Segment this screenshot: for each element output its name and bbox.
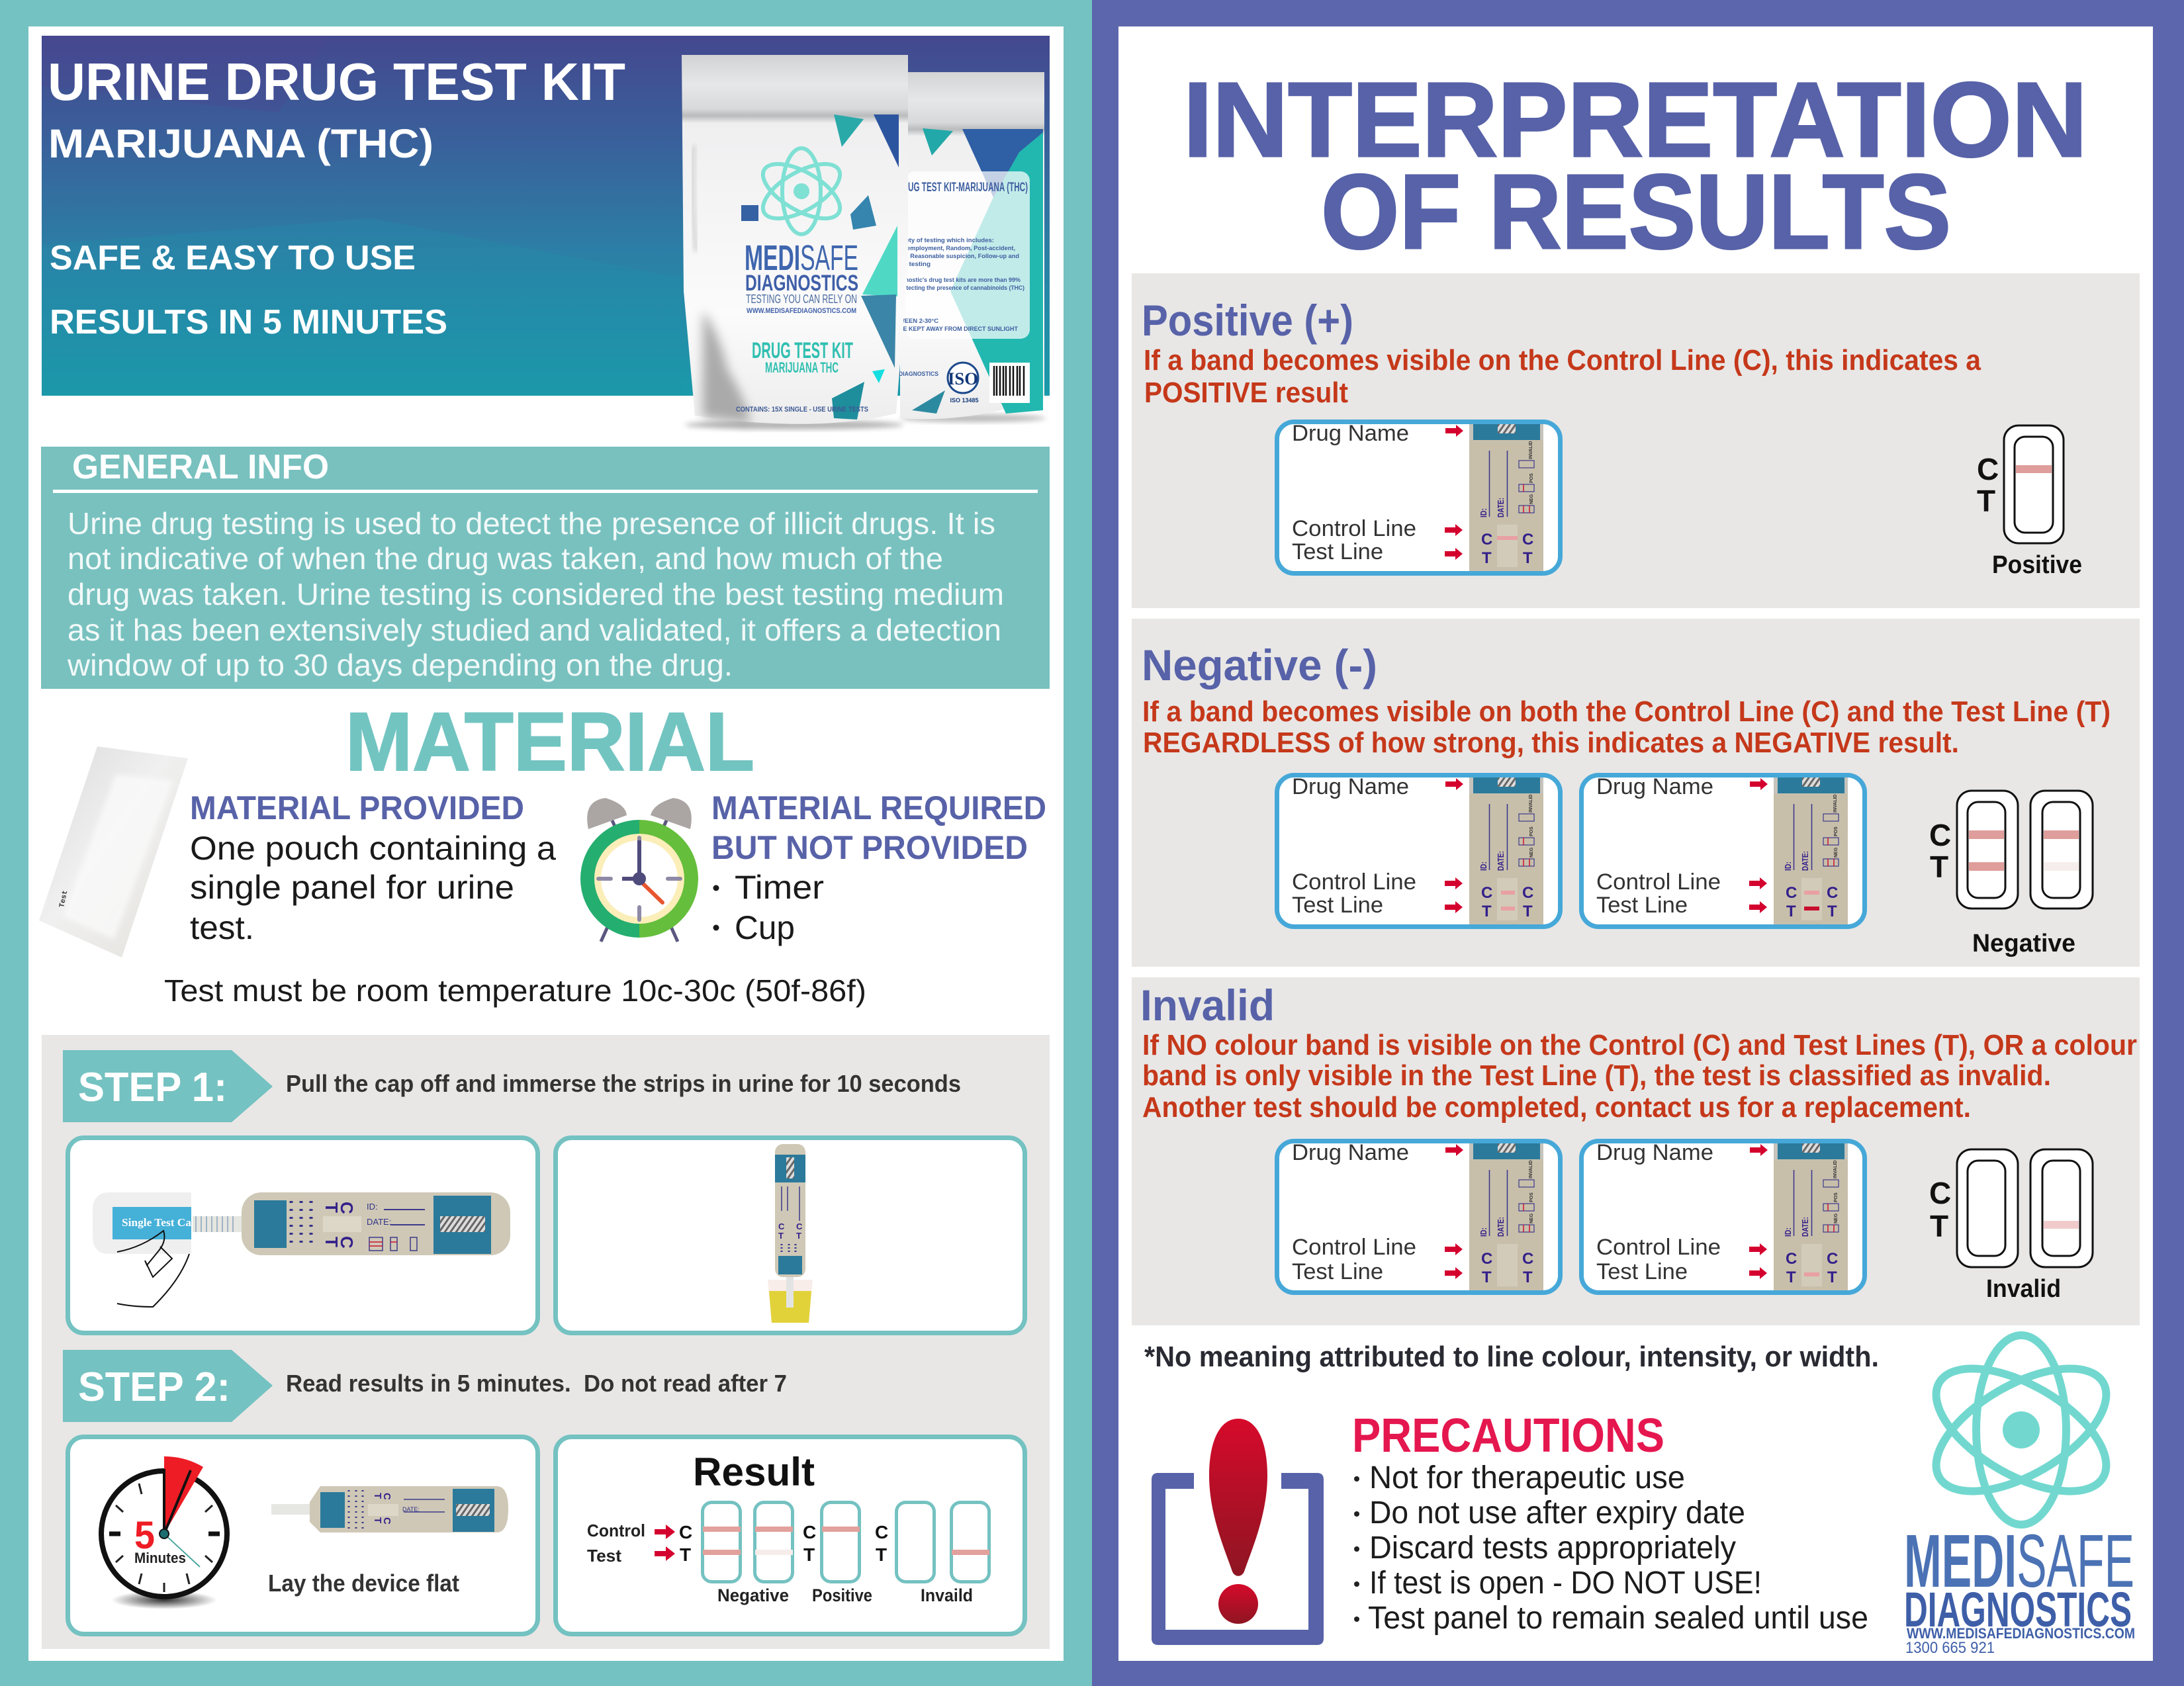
negative test card 2: NEG xyxy=(1834,847,1839,858)
step 1 box: open pouch xyxy=(68,1138,537,1333)
negative test card 2 xyxy=(1582,774,1865,926)
product: back pouch: ISO 13485 xyxy=(950,397,979,404)
product: back pouch: letecting the presence of cannabinoids (THC) xyxy=(901,285,1024,291)
precautions: Test panel to remain sealed until use xyxy=(1368,1601,1868,1636)
invalid test card 2: C xyxy=(1786,1250,1797,1268)
negative test card 2: POS xyxy=(1834,826,1839,836)
banner title: URINE DRUG TEST KIT xyxy=(48,52,625,111)
panel: general info xyxy=(41,447,1050,689)
negative test card 1: INVALID xyxy=(1529,795,1533,813)
step 1 box: open pouch: Single Test Ca xyxy=(122,1216,191,1229)
step 2 box: result legend: C xyxy=(875,1522,888,1542)
product: back pouch: ISO xyxy=(948,369,978,388)
invalid test card 1: C xyxy=(1481,1250,1492,1268)
negative test card 2: Drug Name xyxy=(1596,774,1713,799)
logo: medisafe: WWW.MEDISAFEDIAGNOSTICS.COM xyxy=(1907,1625,2135,1642)
negative test card 1: DATE: xyxy=(1496,851,1506,871)
negative test card 1: POS xyxy=(1529,826,1534,836)
step 2 box: result legend: T xyxy=(680,1544,691,1565)
negative test card 2: T xyxy=(1827,903,1837,920)
product: back pouch: in, Reasonable suspicion, Follow-up and xyxy=(901,253,1019,259)
step 2 box: result legend: C xyxy=(803,1522,816,1542)
invalid test card 1: T xyxy=(1482,1268,1492,1286)
general info text: not indicative of when the drug was taken, and how much of the xyxy=(68,541,943,576)
invalid test card 2: C xyxy=(1827,1250,1838,1268)
panel: invalid xyxy=(1132,977,2140,1325)
positive test card: POS xyxy=(1529,473,1534,483)
left white sheet xyxy=(28,26,1064,1661)
invalid test card 2: Test Line xyxy=(1596,1259,1688,1284)
product: front pouch: TESTING YOU CAN RELY ON xyxy=(746,292,857,306)
step 2 box: result legend: C xyxy=(679,1522,692,1542)
general info text xyxy=(67,506,1004,682)
positive strip diagram: T xyxy=(1977,484,1995,518)
negative test card 2: DATE: xyxy=(1800,851,1810,871)
positive description: POSITIVE result xyxy=(1144,377,1348,409)
negative test card 2: ID: xyxy=(1783,862,1793,871)
step 2 box: result legend xyxy=(556,1437,1024,1634)
positive test card: C xyxy=(1481,531,1492,549)
banner subtitle: MARIJUANA (THC) xyxy=(48,121,433,166)
positive test card: T xyxy=(1482,549,1492,567)
invalid test card 2: T xyxy=(1827,1268,1837,1286)
icon: exclamation alert xyxy=(1152,1419,1324,1645)
positive test card: C xyxy=(1522,531,1533,549)
pouch atom logo xyxy=(754,148,848,234)
positive test card: ID: xyxy=(1479,508,1488,517)
negative description xyxy=(1142,695,2111,759)
material provided: One pouch containing a xyxy=(190,830,556,867)
product: front pouch: DRUG TEST KIT xyxy=(752,338,853,363)
step 2 box: result legend: Test xyxy=(587,1546,621,1566)
invalid test card 1: DATE: xyxy=(1496,1217,1506,1237)
device flat: T xyxy=(372,1517,383,1523)
left background xyxy=(0,0,1092,1686)
banner claim: safe: SAFE & EASY TO USE xyxy=(50,239,416,277)
step 2 banner: STEP 2: xyxy=(78,1364,230,1410)
device flat: DATE: xyxy=(402,1506,420,1513)
negative test card 1: C xyxy=(1481,884,1492,902)
device flat: C xyxy=(381,1517,392,1525)
negative test card 2: Control Line xyxy=(1596,869,1721,895)
negative test card 1: NEG xyxy=(1529,847,1534,858)
step 1 box: dip in cup xyxy=(556,1138,1024,1333)
invalid test card 1: NEG xyxy=(1529,1213,1534,1223)
step 2 box: timer and device xyxy=(68,1437,537,1634)
positive test card xyxy=(1277,421,1561,573)
invalid test card 1: C xyxy=(1522,1250,1533,1268)
step 1 box: dip in cup: C xyxy=(796,1221,803,1231)
material heading: MATERIAL xyxy=(345,696,754,788)
product: back pouch: ty testing xyxy=(901,261,931,267)
invalid test card 1: INVALID xyxy=(1529,1161,1533,1178)
right title xyxy=(1183,60,2087,271)
negative strip diagram: T xyxy=(1930,850,1948,884)
invalid test card 1: POS xyxy=(1529,1192,1534,1202)
invalid strip diagram xyxy=(1929,1149,2093,1303)
general info heading: GENERAL INFO xyxy=(72,448,329,486)
invalid test card 2: Drug Name xyxy=(1596,1140,1713,1165)
invalid test card 1: Drug Name xyxy=(1292,1140,1409,1165)
footnote: *No meaning attributed to line colour, intensity, or width. xyxy=(1144,1341,1879,1373)
material required: BUT NOT PROVIDED xyxy=(711,829,1028,866)
step 2 box: result legend: T xyxy=(876,1544,887,1565)
right background xyxy=(1092,0,2184,1686)
precautions: Discard tests appropriately xyxy=(1369,1531,1736,1566)
negative heading: Negative (-) xyxy=(1142,641,1377,689)
positive test card: Drug Name xyxy=(1292,421,1409,446)
invalid test card 1: Control Line xyxy=(1292,1235,1416,1260)
invalid test card 2: DATE: xyxy=(1800,1217,1810,1237)
positive test card: Test Line xyxy=(1292,539,1383,564)
atom mark xyxy=(1917,1335,2126,1525)
icon: alarm clock xyxy=(580,798,698,942)
precautions: If test is open - DO NOT USE! xyxy=(1369,1566,1762,1601)
device flat xyxy=(271,1486,508,1532)
step 1 text: Pull the cap off and immerse the strips in urine for 10 seconds xyxy=(286,1070,961,1097)
step 2 box: result legend: Control xyxy=(587,1521,645,1540)
invalid strip diagram: Invalid xyxy=(1986,1275,2061,1303)
product: front pouch: MEDISAFE xyxy=(745,238,858,278)
invalid description xyxy=(1142,1029,2137,1124)
step 1 box: open pouch: C xyxy=(337,1202,357,1214)
product: back pouch: BE KEPT AWAY FROM DIRECT SUNLIGHT xyxy=(899,326,1018,332)
icon: timer xyxy=(101,1456,227,1609)
product: front pouch xyxy=(682,55,908,429)
negative test card 2: T xyxy=(1786,903,1796,920)
step 2 banner xyxy=(63,1350,273,1422)
step 1 box: open pouch: ID: xyxy=(367,1202,378,1212)
product: back pouch: WEEN 2-30°C xyxy=(899,318,939,324)
product: back pouch: gnostic's drug test kits are more than 99% xyxy=(901,277,1021,283)
positive description: If a band becomes visible on the Control Line (C), this indicates a xyxy=(1144,344,1981,377)
step 1 box: open pouch: C xyxy=(337,1236,357,1249)
precautions: PRECAUTIONS xyxy=(1352,1409,1664,1462)
negative strip diagram: Negative xyxy=(1972,930,2075,957)
invalid heading: Invalid xyxy=(1140,981,1275,1030)
positive test card: T xyxy=(1523,549,1533,567)
lay flat caption: Lay the device flat xyxy=(268,1570,459,1597)
invalid description: If NO colour band is visible on the Control (C) and Test Lines (T), OR a colour xyxy=(1142,1029,2137,1061)
product: front pouch: DIAGNOSTICS xyxy=(745,271,858,296)
negative test card 1: T xyxy=(1482,903,1492,920)
material provided: test. xyxy=(190,909,254,946)
device flat: T xyxy=(372,1493,383,1499)
icon: test pouch xyxy=(39,746,188,957)
product: back pouch: riety of testing which includes: xyxy=(901,237,994,244)
invalid test card 1: ID: xyxy=(1479,1227,1488,1237)
step 1 box: dip in cup: T xyxy=(796,1231,801,1241)
negative test card 1: Test Line xyxy=(1292,893,1383,918)
positive test card: Control Line xyxy=(1292,516,1416,541)
banner xyxy=(42,36,1050,396)
invalid strip diagram: T xyxy=(1930,1209,1948,1243)
positive test card: INVALID xyxy=(1529,441,1533,459)
precautions: Not for therapeutic use xyxy=(1369,1460,1685,1495)
negative test card 1: T xyxy=(1523,903,1533,920)
general info text: Urine drug testing is used to detect the presence of illicit drugs. It is xyxy=(68,506,995,541)
invalid strip diagram: C xyxy=(1929,1176,1951,1210)
product: front pouch: WWW.MEDISAFEDIAGNOSTICS.COM xyxy=(747,307,856,315)
logo: medisafe xyxy=(1904,1335,2135,1657)
negative test card 2: INVALID xyxy=(1833,795,1838,813)
negative test card 1: Drug Name xyxy=(1292,774,1409,799)
positive test card: NEG xyxy=(1529,494,1534,504)
material provided: MATERIAL PROVIDED xyxy=(190,789,524,826)
invalid test card 2: Control Line xyxy=(1596,1235,1721,1260)
right title: OF RESULTS xyxy=(1321,152,1951,271)
negative test card 2: Test Line xyxy=(1596,893,1688,918)
temperature note: Test must be room temperature 10c-30c (50f-86f) xyxy=(164,973,866,1008)
invalid test card 1: Test Line xyxy=(1292,1259,1383,1284)
invalid test card 2: T xyxy=(1786,1268,1796,1286)
material provided xyxy=(190,789,556,946)
material required: Cup xyxy=(735,909,795,946)
invalid test card 2: NEG xyxy=(1834,1213,1839,1223)
negative test card 1: Control Line xyxy=(1292,869,1416,895)
negative test card 1: ID: xyxy=(1479,862,1488,871)
positive description xyxy=(1144,344,1981,409)
invalid test card 1 xyxy=(1277,1140,1561,1293)
negative description: If a band becomes visible on both the Control Line (C) and the Test Line (T) xyxy=(1142,695,2111,728)
general info text: drug was taken. Urine testing is considered the best testing medium xyxy=(68,577,1004,611)
step 1 banner: STEP 1: xyxy=(78,1065,227,1110)
material required: Timer xyxy=(735,869,824,906)
negative test card 1: C xyxy=(1522,884,1533,902)
step 2 box: result legend: Result xyxy=(693,1450,815,1494)
panel: positive xyxy=(1132,273,2140,608)
invalid test card 2: INVALID xyxy=(1833,1161,1838,1178)
product: back pouch: UG TEST KIT-MARIJUANA (THC) xyxy=(908,181,1028,195)
material provided: single panel for urine xyxy=(190,869,514,906)
step 1 box: open pouch: T xyxy=(322,1202,341,1213)
precautions: Do not use after expiry date xyxy=(1369,1495,1745,1531)
invalid test card 2: ID: xyxy=(1783,1227,1793,1237)
precautions xyxy=(1352,1409,1868,1636)
banner claim: results: RESULTS IN 5 MINUTES xyxy=(50,303,447,341)
logo: medisafe: 1300 665 921 xyxy=(1905,1639,1995,1657)
icon: timer: 5 xyxy=(134,1514,155,1557)
step 1 box: open pouch: DATE: xyxy=(367,1217,391,1227)
step 2 text: Read results in 5 minutes. Do not read after 7 xyxy=(286,1370,787,1397)
right white sheet xyxy=(1118,26,2153,1661)
general info text: window of up to 30 days depending on the drug. xyxy=(67,648,733,682)
icon: timer: Minutes xyxy=(134,1550,186,1566)
product: front pouch: MARIJUANA THC xyxy=(765,359,839,376)
general info text: as it has been extensively studied and validated, it offers a detection xyxy=(68,613,1001,647)
positive strip diagram: C xyxy=(1977,452,1999,486)
material required: MATERIAL REQUIRED xyxy=(711,789,1046,826)
step 2 box: result legend: T xyxy=(803,1544,815,1565)
right title: INTERPRETATION xyxy=(1183,60,2087,179)
positive strip diagram: Positive xyxy=(1992,551,2082,579)
step 1 banner xyxy=(63,1050,273,1122)
product: back pouch: DIAGNOSTICS xyxy=(899,371,938,377)
material required xyxy=(711,789,1046,946)
product: front pouch: CONTAINS: 15X SINGLE - USE URINE TESTS xyxy=(736,406,868,414)
invalid test card 2 xyxy=(1582,1140,1865,1293)
invalid test card 2: POS xyxy=(1834,1192,1839,1202)
device flat: C xyxy=(381,1493,392,1500)
positive test card: DATE: xyxy=(1496,498,1506,517)
negative test card 1 xyxy=(1277,774,1561,926)
step 1 box: open pouch: T xyxy=(322,1237,341,1247)
invalid description: Another test should be completed, contact us for a replacement. xyxy=(1142,1091,1971,1124)
step 1 box: dip in cup: T xyxy=(778,1231,784,1241)
positive heading: Positive (+) xyxy=(1142,296,1353,345)
negative test card 2: C xyxy=(1827,884,1838,902)
icon: test pouch: Test xyxy=(58,890,69,909)
step 2 box: result legend: Positive xyxy=(812,1585,872,1605)
step 1 box: dip in cup: C xyxy=(778,1221,785,1231)
product: back pouch: e-employment, Random, Post-accident, xyxy=(901,245,1015,251)
step 2 box: result legend: Negative xyxy=(717,1585,789,1605)
panel: steps xyxy=(42,1035,1050,1649)
panel: negative xyxy=(1132,619,2140,967)
invalid description: band is only visible in the Test Line (T), the test is classified as invalid. xyxy=(1142,1059,2051,1092)
step 2 box: result legend: Invaild xyxy=(921,1585,973,1605)
product: back pouch xyxy=(899,72,1046,422)
invalid test card 1: T xyxy=(1523,1268,1533,1286)
positive strip diagram xyxy=(1977,425,2082,579)
negative test card 2: C xyxy=(1786,884,1797,902)
negative description: REGARDLESS of how strong, this indicates a NEGATIVE result. xyxy=(1143,727,1959,759)
negative strip diagram: C xyxy=(1929,818,1951,852)
negative strip diagram xyxy=(1929,791,2093,957)
